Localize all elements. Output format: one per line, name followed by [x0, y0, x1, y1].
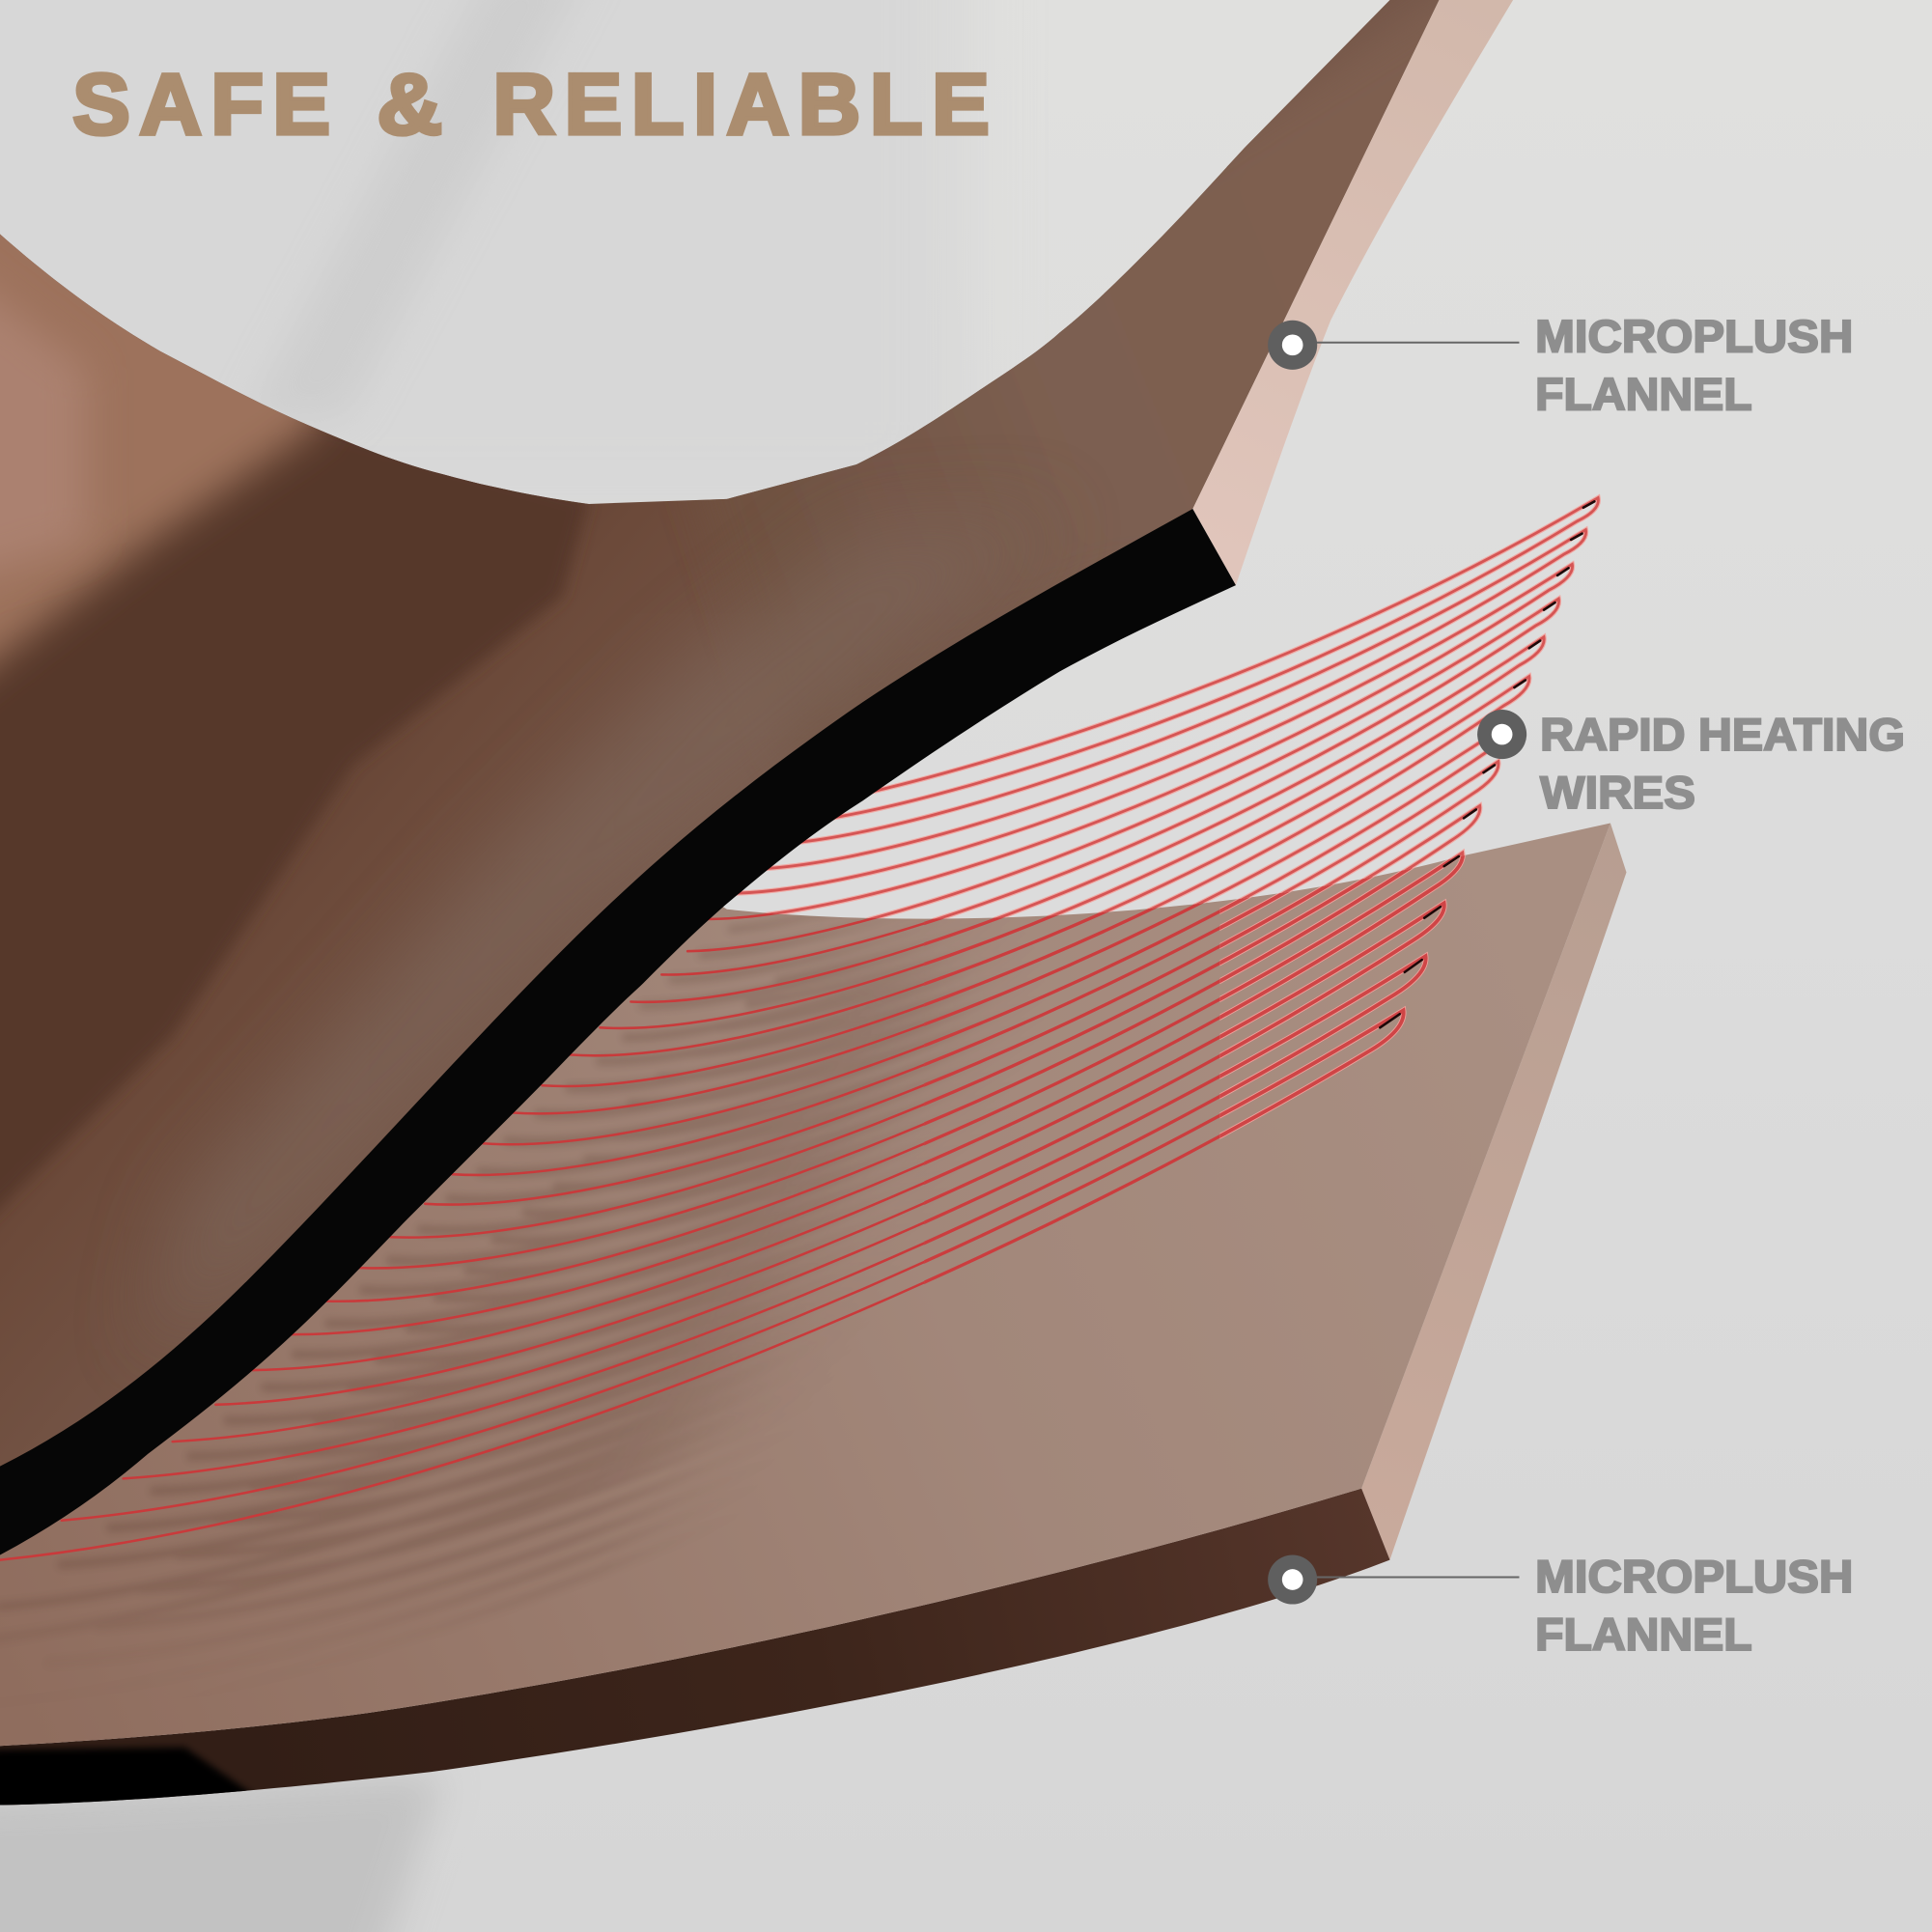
- marker: [1268, 321, 1317, 370]
- flannel dark corner: [0, 1744, 252, 1806]
- wires over background: [736, 494, 1601, 919]
- flannel black underside: [0, 509, 1236, 1554]
- marker: [1268, 1554, 1317, 1605]
- bottom microplush flannel layer: [0, 823, 1627, 1824]
- hairpin tips: [1380, 501, 1594, 1027]
- flannel pale side: [1192, 0, 1513, 585]
- label: RAPID HEATING: [1540, 710, 1905, 761]
- label: FLANNEL: [1535, 369, 1752, 420]
- title: SAFE: [72, 55, 330, 152]
- callout: rapid heating wires: [1477, 710, 1905, 819]
- title: RELIABLE: [492, 55, 990, 152]
- label: FLANNEL: [1535, 1610, 1752, 1661]
- leader line: [1313, 342, 1519, 344]
- rapid heating wires: [0, 498, 1598, 1560]
- callout: bottom microplush flannel: [1268, 1552, 1853, 1661]
- flannel top surface: [0, 823, 1610, 1746]
- top microplush flannel layer: [0, 0, 1602, 1602]
- leader line: [1313, 1576, 1519, 1578]
- label: MICROPLUSH: [1535, 1552, 1853, 1603]
- marker: [1477, 710, 1526, 759]
- label: WIRES: [1540, 768, 1695, 819]
- flannel side face: [1361, 823, 1627, 1560]
- title: &: [378, 55, 442, 152]
- wires over flannel: [0, 855, 1466, 1561]
- flannel front edge: [0, 1489, 1389, 1806]
- flannel brown face: [0, 0, 1439, 1467]
- label: MICROPLUSH: [1535, 311, 1853, 362]
- wire shadows on flannel: [1, 917, 962, 1623]
- callout: top microplush flannel: [1268, 311, 1853, 420]
